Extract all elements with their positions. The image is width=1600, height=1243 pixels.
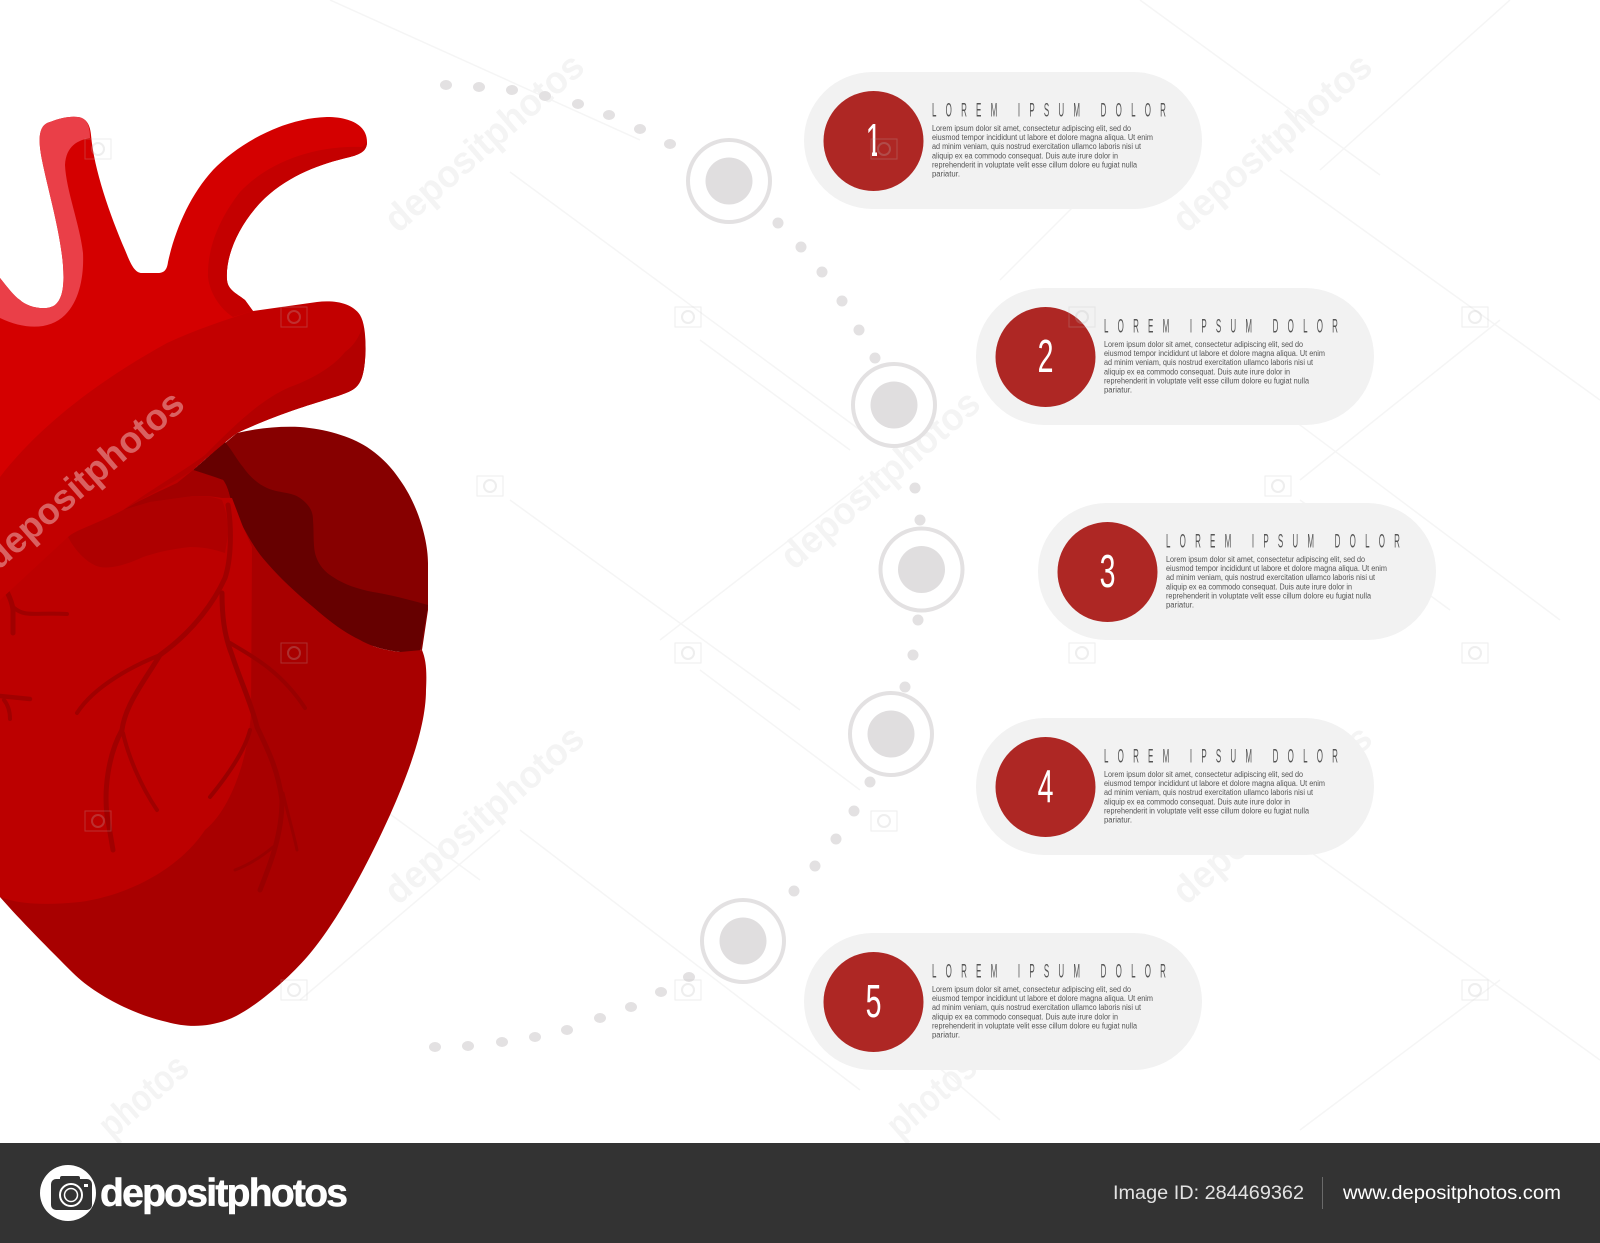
band under vessel	[123, 470, 230, 510]
panel: step 4: LOREM IPSUM DOLOR	[1104, 747, 1338, 768]
watermark camera icons	[85, 139, 1488, 1000]
panel: step 5: ad minim veniam, quis nostrud exercitation ullamco laboris nisi ut	[932, 1003, 1142, 1012]
watermark text: photos	[90, 1046, 197, 1147]
panel: step 3: reprehenderit in voluptate velit esse cillum dolore eu fugiat nulla	[1166, 592, 1371, 600]
website: www.depositphotos.com	[1342, 1182, 1561, 1204]
panel: step 3: LOREM IPSUM DOLOR	[1166, 532, 1400, 553]
panel: step 2	[976, 288, 1374, 425]
panel: step 3: eiusmod tempor incididunt ut labore et dolore magna aliqua. Ut enim	[1166, 564, 1387, 573]
panel: step 5	[804, 933, 1202, 1070]
panel: step 5: aliquip ex ea commodo consequat. Duis aute irure dolor in	[932, 1012, 1118, 1021]
panel: step 5: pariatur.	[932, 1031, 960, 1040]
panel: step 5: 5	[866, 976, 881, 1028]
panel: step 2: reprehenderit in voluptate velit esse cillum dolore eu fugiat nulla	[1104, 376, 1309, 386]
panel: step 3: aliquip ex ea commodo consequat. Duis aute irure dolor in	[1166, 582, 1352, 591]
panel: step 2: Lorem ipsum dolor sit amet, consectetur adipiscing elit, sed do	[1104, 340, 1303, 349]
panel: step 5: eiusmod tempor incididunt ut labore et dolore magna aliqua. Ut enim	[932, 994, 1153, 1003]
panel: step 1: pariatur.	[932, 170, 960, 179]
panel: step 3: 3	[1100, 546, 1115, 598]
panel: step 4: reprehenderit in voluptate velit esse cillum dolore eu fugiat nulla	[1104, 806, 1309, 816]
panel: step 1: aliquip ex ea commodo consequat. Duis aute irure dolor in	[932, 151, 1118, 160]
watermark text: depositphotos	[1164, 717, 1381, 913]
watermark text: depositphotos	[772, 382, 989, 578]
ventricle shadow band	[193, 442, 428, 652]
timeline node 3	[880, 528, 962, 610]
inner shade on arch	[208, 142, 367, 317]
watermark text: photos	[878, 1046, 985, 1147]
panel: step 1: 1	[866, 115, 881, 167]
great vessels, bright	[0, 117, 367, 500]
left ventricle, dark	[193, 427, 428, 650]
panel: step 3: Lorem ipsum dolor sit amet, consectetur adipiscing elit, sed do	[1166, 555, 1365, 564]
image id: Image ID: 284469362	[1113, 1182, 1304, 1204]
panel: step 2: eiusmod tempor incididunt ut labore et dolore magna aliqua. Ut enim	[1104, 349, 1325, 358]
watermark text: depositphotos	[376, 45, 593, 241]
panel: step 1: LOREM IPSUM DOLOR	[932, 101, 1166, 122]
panel: step 4: aliquip ex ea commodo consequat. Duis aute irure dolor in	[1104, 797, 1290, 806]
panel: step 5: LOREM IPSUM DOLOR	[932, 962, 1166, 983]
watermark text: depositphotos	[1164, 45, 1381, 241]
heart illustration	[0, 117, 428, 1026]
panel: step 2: aliquip ex ea commodo consequat. Duis aute irure dolor in	[1104, 367, 1290, 376]
coronary veins	[0, 505, 305, 890]
panel: step 1	[804, 72, 1202, 209]
panel: step 2: 2	[1038, 331, 1053, 383]
timeline node 5	[702, 900, 784, 982]
light highlight on left vessel	[0, 117, 90, 327]
panel: step 1: ad minim veniam, quis nostrud exercitation ullamco laboris nisi ut	[932, 142, 1142, 151]
footer bar	[0, 1143, 1600, 1243]
trunk lower shade	[123, 325, 366, 510]
panel: step 4: pariatur.	[1104, 816, 1132, 825]
panel: step 3: pariatur.	[1166, 601, 1194, 610]
panel: step 1: reprehenderit in voluptate velit esse cillum dolore eu fugiat nulla	[932, 160, 1137, 170]
panel: step 2: ad minim veniam, quis nostrud exercitation ullamco laboris nisi ut	[1104, 358, 1314, 367]
panel: step 4: 4	[1038, 761, 1053, 813]
panel: step 4: Lorem ipsum dolor sit amet, consectetur adipiscing elit, sed do	[1104, 770, 1303, 779]
patch under vessel	[68, 496, 228, 567]
heart body front lighter	[0, 470, 252, 904]
panel: step 3	[1038, 503, 1436, 640]
timeline node 4	[850, 693, 932, 775]
heart body lower	[0, 470, 426, 1026]
panel: step 4: eiusmod tempor incididunt ut labore et dolore magna aliqua. Ut enim	[1104, 779, 1325, 788]
timeline node 2	[853, 364, 935, 446]
logo wordmark: depositphotos	[100, 1172, 348, 1215]
watermark text: depositphotos	[376, 717, 593, 913]
timeline node 1	[688, 140, 770, 222]
panel: step 3: ad minim veniam, quis nostrud exercitation ullamco laboris nisi ut	[1166, 573, 1376, 582]
panel: step 1: Lorem ipsum dolor sit amet, consectetur adipiscing elit, sed do	[932, 124, 1131, 133]
panel: step 4: ad minim veniam, quis nostrud exercitation ullamco laboris nisi ut	[1104, 788, 1314, 797]
panel: step 5: Lorem ipsum dolor sit amet, consectetur adipiscing elit, sed do	[932, 985, 1131, 994]
dotted arc	[429, 80, 926, 1052]
pulmonary trunk	[0, 301, 365, 600]
panel: step 2: LOREM IPSUM DOLOR	[1104, 317, 1338, 338]
icon: camera logo	[40, 1165, 96, 1221]
watermark text	[90, 45, 1381, 1147]
panel: step 1: eiusmod tempor incididunt ut labore et dolore magna aliqua. Ut enim	[932, 133, 1153, 142]
panel: step 2: pariatur.	[1104, 386, 1132, 395]
panel: step 4	[976, 718, 1374, 855]
panel: step 5: reprehenderit in voluptate velit esse cillum dolore eu fugiat nulla	[932, 1022, 1137, 1030]
